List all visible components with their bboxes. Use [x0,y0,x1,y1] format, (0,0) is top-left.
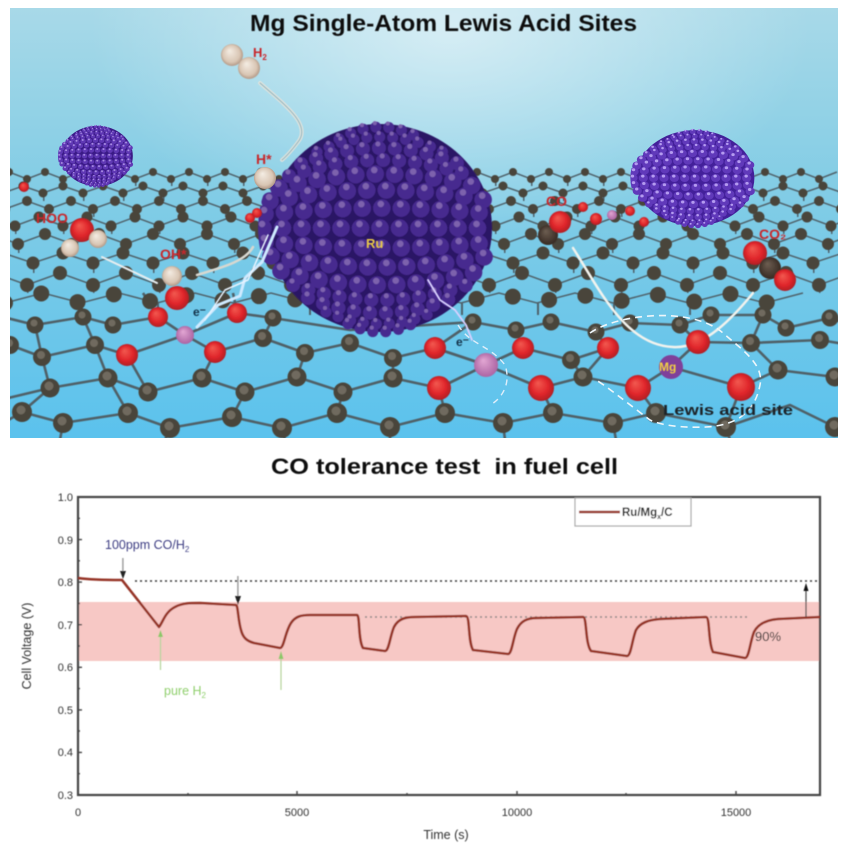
annotation: 100ppm CO/H2: 100ppm CO/H [105,538,185,552]
plot frame and ticks [78,497,820,795]
y axis tick labels: 0.3 [58,790,73,802]
illustration labels: H [253,45,262,60]
illustration labels: Lewis acid site [663,402,793,419]
x axis tick labels: 15000 [721,807,751,819]
illustration labels: Ru [366,236,383,251]
x axis title: Time (s) [423,828,469,842]
illustration labels: H* [256,151,272,167]
y axis tick labels: 0.4 [58,747,73,759]
illustration labels [36,45,793,419]
voltage curve [78,578,820,658]
arrow: CO on second [235,576,241,605]
sky background [10,8,838,438]
x axis tick labels [75,807,751,819]
arrow: voltage retention [804,583,808,617]
arrow: pure H2 second [278,651,284,690]
dashed outline: electron site [458,325,507,405]
y axis tick labels: 0.7 [58,620,73,632]
molecule: OH [162,266,189,310]
dashed outline: Lewis acid site [590,316,761,427]
y axis tick labels [58,492,73,802]
illustration labels: OH* [160,246,187,262]
graphene lattice [0,172,846,440]
illustration labels: HOO [36,210,68,226]
x axis tick labels: 5000 [285,807,309,819]
annotation: 100ppm CO/H2: 2 [185,545,190,554]
legend: Ru/Mg [622,507,657,519]
illustration labels: 2 [262,53,267,62]
active site atoms [19,182,755,401]
y axis tick labels: 0.9 [58,535,73,547]
electron transfer lightning [197,227,472,340]
annotation: 90%: 90% [755,629,781,644]
illustration labels: e⁻ [193,305,206,319]
molecule: H2O [61,218,107,257]
annotation: pure H2: pure H [164,684,202,698]
illustration labels: CO₂ [759,226,786,242]
arrow: CO on first [120,558,126,579]
legend: x [657,514,661,521]
title: Mg Single-Atom Lewis Acid Sites [250,10,637,36]
legend [575,498,691,526]
y axis title: Cell Voltage (V) [20,603,34,689]
molecule: CO [538,211,571,245]
Ru nanoparticle: small right [632,130,757,226]
Ru nanoparticle: large centre [262,123,497,332]
y axis tick labels: 0.8 [58,577,73,589]
illustration labels: e⁻ [456,335,469,349]
x axis tick labels: 0 [75,807,81,819]
molecule: H2 [221,44,260,79]
molecule: adsorbed H [254,167,276,189]
molecule: CO2 [743,241,796,291]
y axis tick labels: 1.0 [58,492,73,504]
x axis tick labels: 10000 [502,807,532,819]
illustration labels: Mg [659,360,676,374]
arrow: pure H2 first [158,630,163,670]
y axis tick labels: 0.6 [58,662,73,674]
Ru nanoparticle: small left [59,126,134,186]
annotation: pure H2: 2 [202,691,207,700]
reference dotted lines [135,581,820,617]
line chart: CO tolerance [20,492,820,842]
y axis tick labels: 0.5 [58,705,73,717]
illustration labels: CO [546,193,567,209]
tolerance band [79,602,820,661]
legend: /C [661,507,673,519]
reaction flow arrows [102,83,753,347]
chart heading: CO tolerance test in fuel cell [271,454,618,479]
panel: catalyst illustration [0,8,846,440]
